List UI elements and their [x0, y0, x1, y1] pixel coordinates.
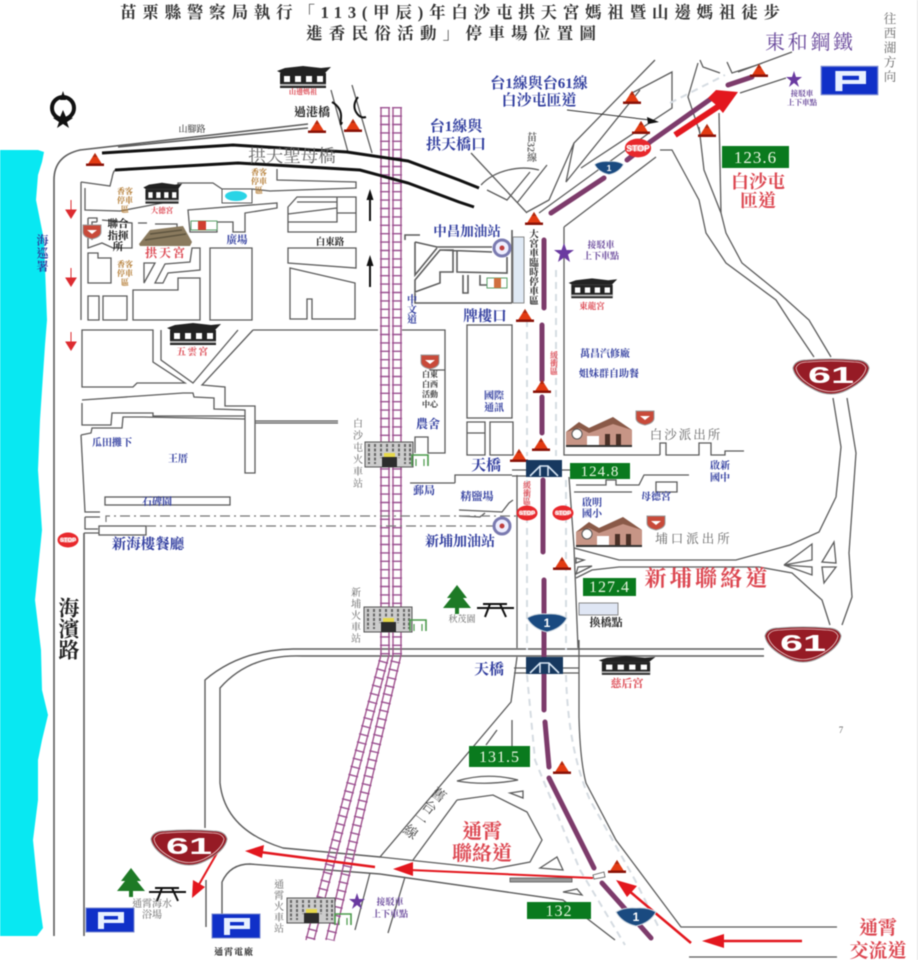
callout: arrow to interchange [567, 110, 650, 120]
place labels: north west: 指揮 [108, 229, 129, 242]
km marker 132 [527, 902, 591, 920]
shield: highway 61 [765, 627, 841, 662]
place labels: north west: 香客 [117, 259, 133, 269]
place labels: south: 聯絡道 [452, 842, 512, 865]
place labels: center: 郵局 [413, 483, 435, 497]
shield: highway 61: 61 [166, 834, 212, 859]
callout arrowhead [647, 117, 659, 124]
place labels: south: 通霄 [462, 819, 502, 843]
command post outline [88, 218, 177, 248]
place labels: north west: 拱天聖母橋 [248, 146, 336, 166]
stop sign [516, 506, 538, 520]
place labels: center: 啟新 [710, 459, 730, 472]
cones [86, 64, 768, 873]
stop sign: STOP [519, 511, 535, 517]
icon: seven-eleven stores [191, 221, 507, 288]
place labels: center: 接駁車 [587, 239, 615, 250]
highway 61 north curves [660, 113, 831, 357]
highway 61 mid [205, 649, 764, 940]
place labels: center: 啟明 [582, 496, 602, 509]
bridge approach [331, 85, 372, 153]
place labels: north east: 白沙屯匝道 [501, 91, 577, 109]
place labels: center: 白西 [422, 379, 438, 389]
interchange small box [593, 872, 605, 879]
place labels: center: 7 [839, 725, 844, 735]
dash-dot road [106, 516, 517, 526]
place labels: north east: 台1線與 [430, 117, 484, 135]
place labels: center: 姐妹群自助餐 [579, 367, 639, 380]
place labels: north west: 山邊媽祖 [289, 87, 317, 96]
km marker 123.6: 123.6 [734, 148, 777, 167]
stop sign [58, 532, 78, 548]
place labels: center: 通訊 [484, 401, 504, 414]
place labels: north east: 匝道 [740, 190, 776, 211]
transfer point box [579, 603, 618, 615]
shield: highway 1 [527, 614, 567, 632]
shield: highway 61 [793, 359, 869, 394]
title [120, 2, 780, 43]
shield: highway 1 [616, 908, 656, 926]
shuttle stops stars [349, 71, 802, 909]
place labels: center: 白沙派出所 [650, 427, 722, 442]
red route arrows [192, 90, 802, 948]
place labels: north west: 聯合 [108, 217, 129, 230]
stop sign [625, 139, 651, 157]
shield: highway 1: 1 [633, 910, 640, 924]
lane dashes [527, 75, 725, 945]
district blocks north [81, 169, 356, 320]
place labels: center: 埔口派出所 [655, 531, 733, 546]
gas station blocks [405, 230, 512, 303]
shield: highway 61 [151, 830, 227, 865]
place labels: south: 舊台一線 [399, 783, 449, 843]
place labels: center: 新埔加油站 [425, 533, 495, 550]
temples [143, 66, 655, 675]
place labels: center: 秋茂園 [448, 613, 476, 624]
sea [0, 150, 48, 936]
place labels: south [132, 783, 907, 960]
pool [222, 189, 252, 203]
blocks east of temple [88, 197, 356, 320]
place labels: south: 通霄電廠 [214, 946, 254, 957]
place labels: south: 上下車點 [372, 908, 408, 919]
place labels: center: 王厝 [168, 452, 188, 465]
junction side roads [471, 60, 672, 213]
station greenery [335, 455, 428, 925]
place labels: north west: 區 [121, 277, 129, 287]
place labels: north east: 接駁車 [791, 88, 814, 98]
place labels: center [56, 223, 844, 735]
place labels: center: 天橋 [474, 660, 504, 678]
place labels: north west [35, 87, 345, 358]
km marker 132: 132 [546, 903, 572, 920]
place labels: center: 瓜田攤下 [92, 436, 133, 449]
shield: highway 61: 61 [808, 363, 854, 388]
place labels: center: 精鹽場 [460, 489, 494, 503]
shield: highway 1: 1 [607, 163, 612, 173]
gas station marks [500, 246, 504, 528]
overpass [526, 460, 562, 477]
place labels: north west: 五雲宮 [176, 346, 210, 358]
place labels: north west: 大德宮 [151, 205, 174, 215]
pool water [225, 191, 247, 201]
blocks east of railway [402, 330, 512, 483]
place labels: north west: 海巡署 [35, 233, 49, 273]
place labels: north east: 往西湖方向 [882, 12, 896, 84]
place labels: south: 通霄 [859, 916, 897, 939]
black arrows [366, 189, 374, 287]
km marker 131.5 [469, 746, 530, 767]
place labels: south: 接駁車 [376, 896, 404, 907]
place labels: north west: 白東路 [316, 236, 345, 248]
km marker 131.5: 131.5 [479, 749, 520, 766]
stop sign: STOP [60, 538, 76, 544]
title: 苗栗縣警察局執行「113(甲辰)年白沙屯拱天宮媽祖暨山邊媽祖徒步 [120, 2, 780, 22]
bold bridge 拱天聖母橋 [102, 145, 479, 207]
place labels: center: 中文道 [404, 293, 416, 325]
place labels: center: 新埔火車站 [348, 586, 360, 644]
overpass road stubs [512, 470, 579, 673]
place labels: center: 活動 [422, 389, 438, 399]
place labels: north east [426, 12, 896, 211]
place labels: north east: 拱天橋口 [426, 135, 486, 153]
place labels: south: 通霄海水 [132, 897, 172, 910]
place labels: north west: 香客 [251, 167, 267, 177]
過港橋 bridge brackets [332, 97, 366, 124]
stop sign: STOP [626, 143, 650, 153]
stop sign: STOP [555, 511, 571, 517]
place labels: north east: 東和鋼鐵 [765, 31, 853, 54]
place labels: north west: 過港橋 [294, 104, 330, 119]
place labels: north west: 廣場 [226, 233, 248, 246]
place labels: center: 緩衝區 [550, 350, 558, 375]
place labels: center: 中昌加油站 [433, 223, 501, 239]
place labels: center: 白東 [422, 369, 438, 379]
place labels: north east: 上下車點 [787, 97, 817, 107]
parking signs [86, 66, 878, 938]
km marker 124.8: 124.8 [581, 464, 619, 480]
place labels: north east: 苗32線 [524, 131, 536, 162]
place labels: center: 國際 [484, 389, 505, 402]
shield: highway 61: 61 [780, 631, 826, 656]
title: 進香民俗活動」停車場位置圖 [306, 23, 596, 43]
place labels: center: 天橋 [471, 456, 501, 474]
place labels: center: 中心 [422, 399, 439, 409]
place labels: center: 農舍 [416, 416, 440, 431]
km marker 124.8 [570, 463, 630, 480]
temporary parking zone [513, 237, 524, 303]
place labels: north west: 香客 [117, 186, 133, 196]
train stations [287, 442, 413, 923]
km marker 123.6 [722, 146, 789, 168]
place labels: center: 新埔聯絡道 [644, 566, 768, 591]
stop sign [552, 506, 574, 520]
place labels: south: 通霄火車站 [272, 879, 284, 934]
place labels: north west: 區 [255, 185, 263, 195]
place labels: center: 石碑園 [142, 495, 172, 508]
place labels: center: 國中 [710, 471, 730, 484]
right edge line [916, 0, 918, 960]
railway [306, 107, 401, 940]
place labels: center: 上下車點 [583, 250, 619, 261]
icon: north compass [52, 91, 74, 128]
place labels: center: 緩衝區 [522, 480, 532, 505]
place labels: center: 母德宮 [641, 490, 671, 503]
place labels: center: 大宮車臨時停車區 [527, 228, 539, 305]
district blocks mid [81, 330, 378, 533]
place labels: center: 國小 [582, 507, 603, 520]
place labels: north west: 停車 [117, 195, 133, 205]
place labels: north west: 山腳路 [178, 123, 206, 134]
tongxiao link [355, 720, 582, 933]
place labels: center: 白沙屯火車站 [350, 417, 362, 490]
place labels: center: 東龍宮 [579, 301, 605, 311]
place labels: center: 換橋點 [590, 615, 622, 629]
place labels: south: 浴場 [142, 908, 162, 921]
overpass [526, 657, 563, 674]
place labels: center: 慈后宮 [610, 676, 644, 690]
place labels: north west: 停車 [251, 176, 267, 186]
place labels: center: 萬昌汽修廠 [580, 347, 630, 360]
picnic parks [117, 585, 514, 901]
place labels: north east: 白沙屯 [731, 172, 785, 192]
shield: highway 1 [595, 161, 623, 174]
place labels: north west: 所 [113, 240, 124, 253]
place labels: center: 海濱路 [56, 597, 80, 660]
icon: gas stations [494, 240, 510, 534]
km marker 127.4: 127.4 [589, 579, 630, 596]
place labels: center: 牌樓口 [463, 307, 507, 325]
interchange gray bar [510, 878, 572, 882]
place labels: north east: 台1線與台61線 [490, 74, 588, 92]
place labels: north west: 區 [121, 204, 129, 214]
place labels: north west: 拱天宮 [145, 245, 185, 260]
place labels: center: 新海樓餐廳 [112, 535, 186, 553]
red south arrows [66, 200, 76, 350]
highway centerline [542, 77, 752, 938]
place labels: north west: 停車 [117, 268, 133, 278]
icon: police buildings [83, 225, 665, 547]
main road edges [380, 475, 837, 957]
icon: Gongtian temple [139, 226, 192, 246]
local streets east [574, 475, 689, 492]
coastal road [54, 124, 308, 936]
shield: highway 1: 1 [544, 616, 551, 630]
